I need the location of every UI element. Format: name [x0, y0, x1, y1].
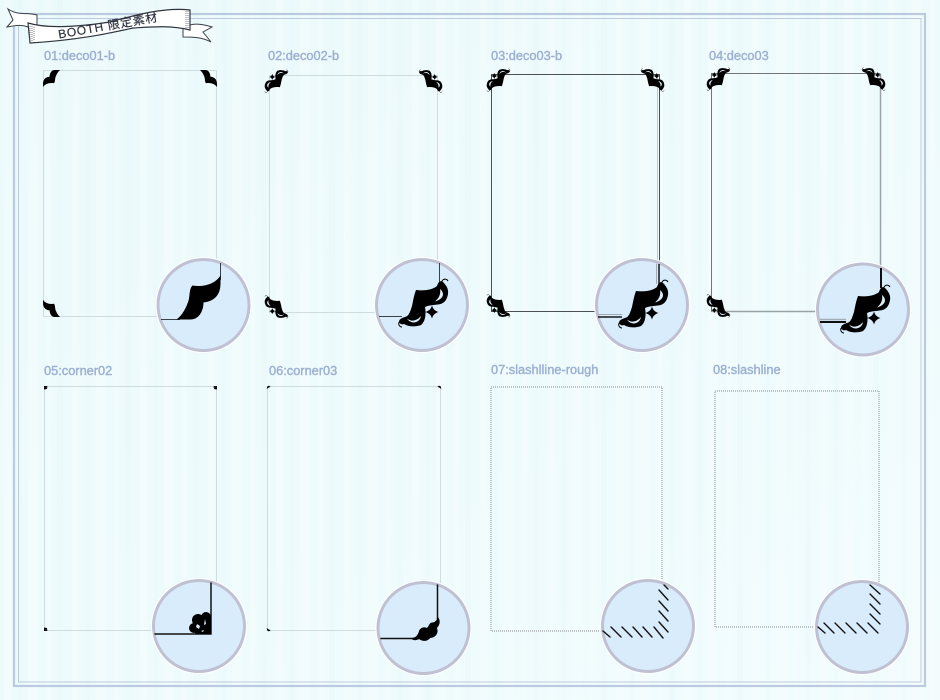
corner ornaments 02: [265, 70, 442, 318]
label 02: 02:deco02-b: [268, 48, 339, 63]
panel 08: slashline: [713, 362, 909, 674]
ribbon title text: BOOTH 限定素材: [57, 10, 159, 41]
zoom lens 04: [816, 262, 910, 356]
panel 07: slashlline-rough: [491, 362, 695, 673]
ribbon main band: [28, 9, 190, 43]
corner ornaments 06: [267, 386, 441, 631]
zoom lens 06: [376, 581, 470, 675]
label 04: 04:deco03: [709, 48, 769, 63]
panel 01: deco01-b: [43, 48, 250, 352]
frame 02: [270, 76, 438, 312]
label 03: 03:deco03-b: [491, 48, 562, 63]
panel 03: deco03-b: [487, 48, 689, 352]
corner ornaments 03: [487, 69, 664, 317]
corner ornaments 04: [707, 68, 885, 317]
ribbon end hatching: [30, 11, 188, 41]
zoom lens 02: [375, 258, 469, 352]
frame 05: [44, 386, 216, 630]
label 05: 05:corner02: [44, 363, 112, 378]
ribbon right tail: [183, 24, 212, 42]
frame 01: [44, 70, 216, 316]
label 08: 08:slashline: [713, 362, 781, 377]
label 01: 01:deco01-b: [44, 48, 115, 63]
corner ornaments 01: [43, 70, 217, 317]
label 07: 07:slashlline-rough: [491, 362, 598, 377]
ribbon left tail: [7, 9, 37, 30]
panel 04: deco03: [707, 48, 910, 356]
panel 05: corner02: [44, 363, 246, 673]
frame 06: [268, 386, 440, 630]
zoom lens 05: [152, 579, 246, 673]
label 06: 06:corner03: [269, 363, 337, 378]
title ribbon: BOOTH 限定素材: [7, 9, 212, 43]
frame 07: [491, 387, 662, 631]
frame 08: [715, 391, 879, 627]
zoom lens 08: [815, 580, 909, 674]
zoom lens 03: [595, 258, 689, 352]
zoom lens 07: [601, 579, 695, 673]
panel 06: corner03: [267, 363, 470, 675]
frame 04: [712, 74, 880, 312]
zoom lens 01: [156, 258, 250, 352]
panel 02: deco02-b: [265, 48, 469, 352]
frame 03: [492, 74, 660, 312]
corner ornaments 05: [44, 386, 217, 631]
